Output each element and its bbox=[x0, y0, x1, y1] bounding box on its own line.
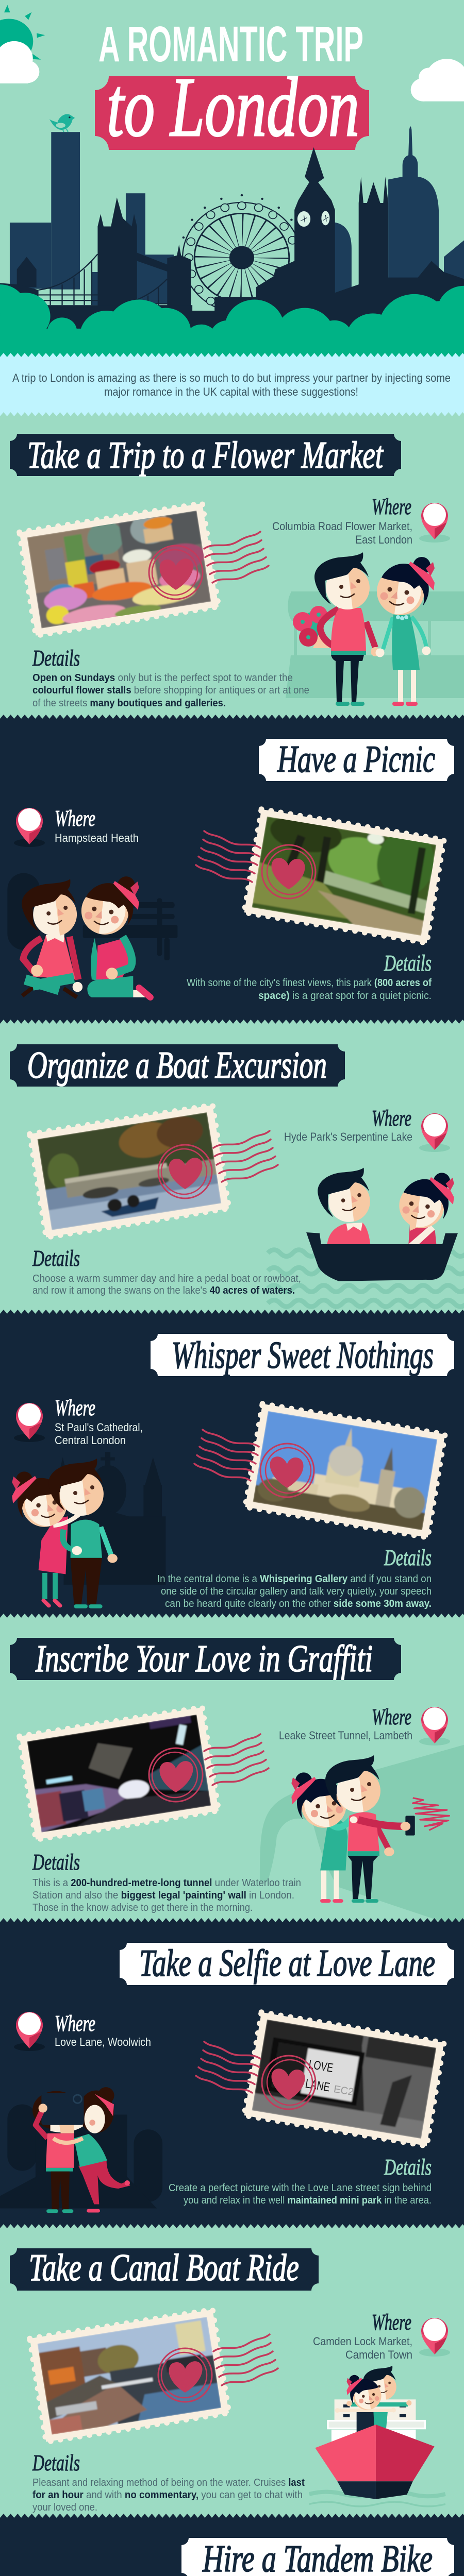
where label bbox=[284, 1106, 412, 1143]
details bbox=[157, 1545, 432, 1609]
where label bbox=[55, 806, 139, 844]
park backdrop bbox=[0, 2104, 162, 2208]
where label bbox=[279, 1704, 412, 1742]
where label: Columbia Road Flower Market, bbox=[272, 520, 412, 533]
ship hull bbox=[315, 2425, 435, 2499]
man bbox=[314, 552, 380, 706]
panel: Whisper Sweet Nothings bbox=[0, 1310, 464, 1618]
icon: left cloud bbox=[0, 41, 39, 83]
details: Open on Sundays only but is the perfect spot to wander the bbox=[32, 672, 293, 684]
details: Details bbox=[32, 1246, 80, 1271]
market stall backdrop bbox=[286, 591, 464, 698]
where label: Leake Street Tunnel, Lambeth bbox=[279, 1729, 412, 1742]
icon: spray heart bbox=[413, 1798, 449, 1830]
panel: Take a Selfie at Love Lane bbox=[0, 1918, 464, 2228]
panel: Organize a Boat Excursion bbox=[0, 1020, 464, 1314]
cathedral backdrop bbox=[58, 1452, 165, 1585]
details: Details bbox=[384, 951, 432, 976]
where label: Where bbox=[372, 1704, 411, 1730]
couple whispering bbox=[39, 1452, 165, 1608]
where label: Where bbox=[55, 806, 95, 831]
details: Choose a warm summer day and hire a pedal boat or rowboat, bbox=[32, 1273, 301, 1284]
postmark bbox=[158, 2334, 278, 2402]
postage stamp: Love Lane sign: LANE bbox=[304, 2077, 331, 2094]
where label: East London bbox=[355, 533, 412, 546]
icon: right cloud bbox=[411, 59, 464, 101]
postmark bbox=[158, 1131, 278, 1198]
icon: location pin bbox=[419, 503, 450, 543]
panel: Take a Canal Boat Ride bbox=[0, 2224, 464, 2518]
details: Details bbox=[384, 2155, 432, 2180]
where label: St Paul's Cathedral, bbox=[55, 1421, 143, 1434]
intro text: major romance in the UK capital with these suggestions! bbox=[104, 385, 358, 398]
bench and tree backdrop bbox=[7, 873, 177, 960]
waves bbox=[309, 2492, 445, 2506]
where label: Central London bbox=[55, 1434, 126, 1447]
title banner: to London: to London bbox=[107, 60, 359, 154]
where label: Where bbox=[372, 2310, 411, 2335]
man bbox=[347, 1812, 415, 1903]
details: Details bbox=[32, 1850, 80, 1875]
where label: Camden Lock Market, bbox=[313, 2335, 412, 2348]
couple bbox=[335, 2400, 411, 2433]
postage stamp: Love Lane sign: EC2 bbox=[333, 2083, 355, 2098]
couple sitting on a bench bbox=[7, 873, 177, 997]
where label: Where bbox=[372, 494, 411, 519]
where label: Where bbox=[372, 1106, 411, 1131]
details: This is a 200-hundred-metre-long tunnel under Waterloo train bbox=[32, 1877, 301, 1889]
details: In the central dome is a Whispering Gallery and if you stand on bbox=[157, 1573, 432, 1585]
postage stamp: Hampstead Heath bbox=[244, 805, 445, 943]
boat bbox=[306, 1232, 458, 1281]
man body bbox=[36, 2104, 74, 2213]
details bbox=[32, 1850, 301, 1913]
where label: Love Lane, Woolwich bbox=[55, 2036, 151, 2048]
where label bbox=[272, 494, 412, 546]
woman bbox=[39, 1513, 81, 1606]
postage stamp: Camden Lock bbox=[30, 2310, 229, 2442]
details: for an hour and with no commentary, you can get to chat with bbox=[32, 2489, 303, 2501]
details: Those in the know advise to get there in the morning. bbox=[32, 1902, 253, 1913]
details bbox=[187, 951, 432, 1002]
icon: sun bbox=[0, 5, 45, 64]
details: space) is a great spot for a quiet picnic. bbox=[258, 990, 432, 1002]
icon: location pin bbox=[14, 808, 45, 847]
where label: Camden Town bbox=[345, 2348, 412, 2361]
details: Details bbox=[32, 646, 80, 671]
icon: location pin bbox=[419, 1707, 450, 1745]
couple painting a heart bbox=[291, 1755, 449, 1903]
panel: Inscribe Your Love in Graffiti bbox=[0, 1614, 464, 1922]
details: Create a perfect picture with the Love Lane street sign behind bbox=[169, 2182, 432, 2194]
details: With some of the city's finest views, this park (800 acres of bbox=[187, 977, 432, 989]
where label bbox=[55, 2011, 151, 2048]
postage stamp: Love Lane sign: LOVE bbox=[307, 2057, 334, 2075]
heads bbox=[32, 2087, 114, 2133]
woman bbox=[320, 1817, 349, 1903]
icon: location pin bbox=[419, 1113, 450, 1152]
couple taking a selfie bbox=[0, 2087, 162, 2213]
intro text bbox=[12, 371, 451, 398]
postmark bbox=[196, 2042, 316, 2109]
postmark bbox=[196, 831, 316, 899]
water waves bbox=[268, 1250, 464, 1307]
details: one side of the circular gallery and talk very quietly, your speech bbox=[161, 1586, 432, 1597]
canal boat with couple bbox=[309, 2399, 445, 2506]
Big Ben clock faces bbox=[297, 211, 329, 227]
where label: Where bbox=[55, 2011, 95, 2036]
woman sitting bbox=[87, 937, 151, 997]
icon: location pin bbox=[14, 1403, 45, 1442]
details: Details bbox=[384, 1545, 432, 1570]
details: colourful flower stalls before shopping for antiques or art at one bbox=[32, 685, 309, 696]
details: Pleasant and relaxing method of being on the water. Cruises last bbox=[32, 2477, 305, 2488]
ship cabin bbox=[328, 2399, 425, 2442]
couple in rowing boat bbox=[306, 1167, 458, 1281]
postmark bbox=[149, 532, 269, 599]
postage stamp: Leake Street bbox=[20, 1707, 219, 1840]
postage stamp: Love Lane sign bbox=[244, 2012, 444, 2146]
details: and row it among the swans on the lake's 40 acres of waters. bbox=[32, 1285, 295, 1296]
details: your loved one. bbox=[32, 2502, 97, 2513]
panel: Take a Trip to a Flower Market bbox=[0, 416, 464, 719]
bushes bbox=[0, 284, 464, 363]
icon: bird bbox=[49, 114, 75, 132]
panel: page header bbox=[0, 0, 464, 363]
details bbox=[32, 646, 309, 709]
panel: Have a Picnic bbox=[0, 715, 464, 1024]
where label: Where bbox=[55, 1395, 95, 1420]
postmark bbox=[194, 1430, 314, 1497]
postage stamp: flower market bbox=[20, 503, 219, 636]
where label bbox=[55, 1395, 143, 1447]
heading: Organize a Boat Excursion bbox=[27, 1044, 327, 1087]
details: of the streets many boutiques and galleries. bbox=[32, 698, 226, 709]
postage stamp: Serpentine bbox=[30, 1105, 229, 1238]
woman body bbox=[53, 2134, 130, 2213]
postage stamp: St Paul's bbox=[245, 1404, 445, 1537]
panel: Hire a Tandem Bike bbox=[0, 2514, 464, 2576]
heading: Take a Canal Boat Ride bbox=[29, 2247, 299, 2289]
icon: location pin bbox=[419, 2318, 450, 2357]
details bbox=[169, 2155, 432, 2206]
man bbox=[63, 1520, 118, 1608]
where label: Hampstead Heath bbox=[55, 832, 139, 844]
woman bbox=[375, 557, 435, 706]
London skyline bbox=[0, 114, 464, 337]
ferris wheel bbox=[183, 194, 301, 313]
details: Details bbox=[32, 2450, 80, 2476]
man sitting bbox=[22, 934, 82, 997]
bouquet bbox=[293, 606, 333, 648]
details: can be heard quite clearly on the other side some 30m away. bbox=[165, 1598, 432, 1609]
icon: location pin bbox=[14, 2012, 45, 2051]
postmark bbox=[149, 1734, 269, 1802]
details bbox=[32, 2450, 305, 2513]
where label: Hyde Park's Serpentine Lake bbox=[284, 1130, 412, 1143]
details bbox=[32, 1246, 301, 1296]
panel: introduction band bbox=[0, 353, 464, 416]
where label bbox=[313, 2310, 412, 2361]
tunnel backdrop bbox=[260, 1745, 464, 1922]
details: you and relax in the well maintained mini park in the area. bbox=[184, 2195, 432, 2206]
camera bbox=[41, 2093, 84, 2125]
couple with bouquet bbox=[293, 552, 435, 706]
details: Station and also the biggest legal 'painting' wall in London. bbox=[32, 1890, 294, 1901]
